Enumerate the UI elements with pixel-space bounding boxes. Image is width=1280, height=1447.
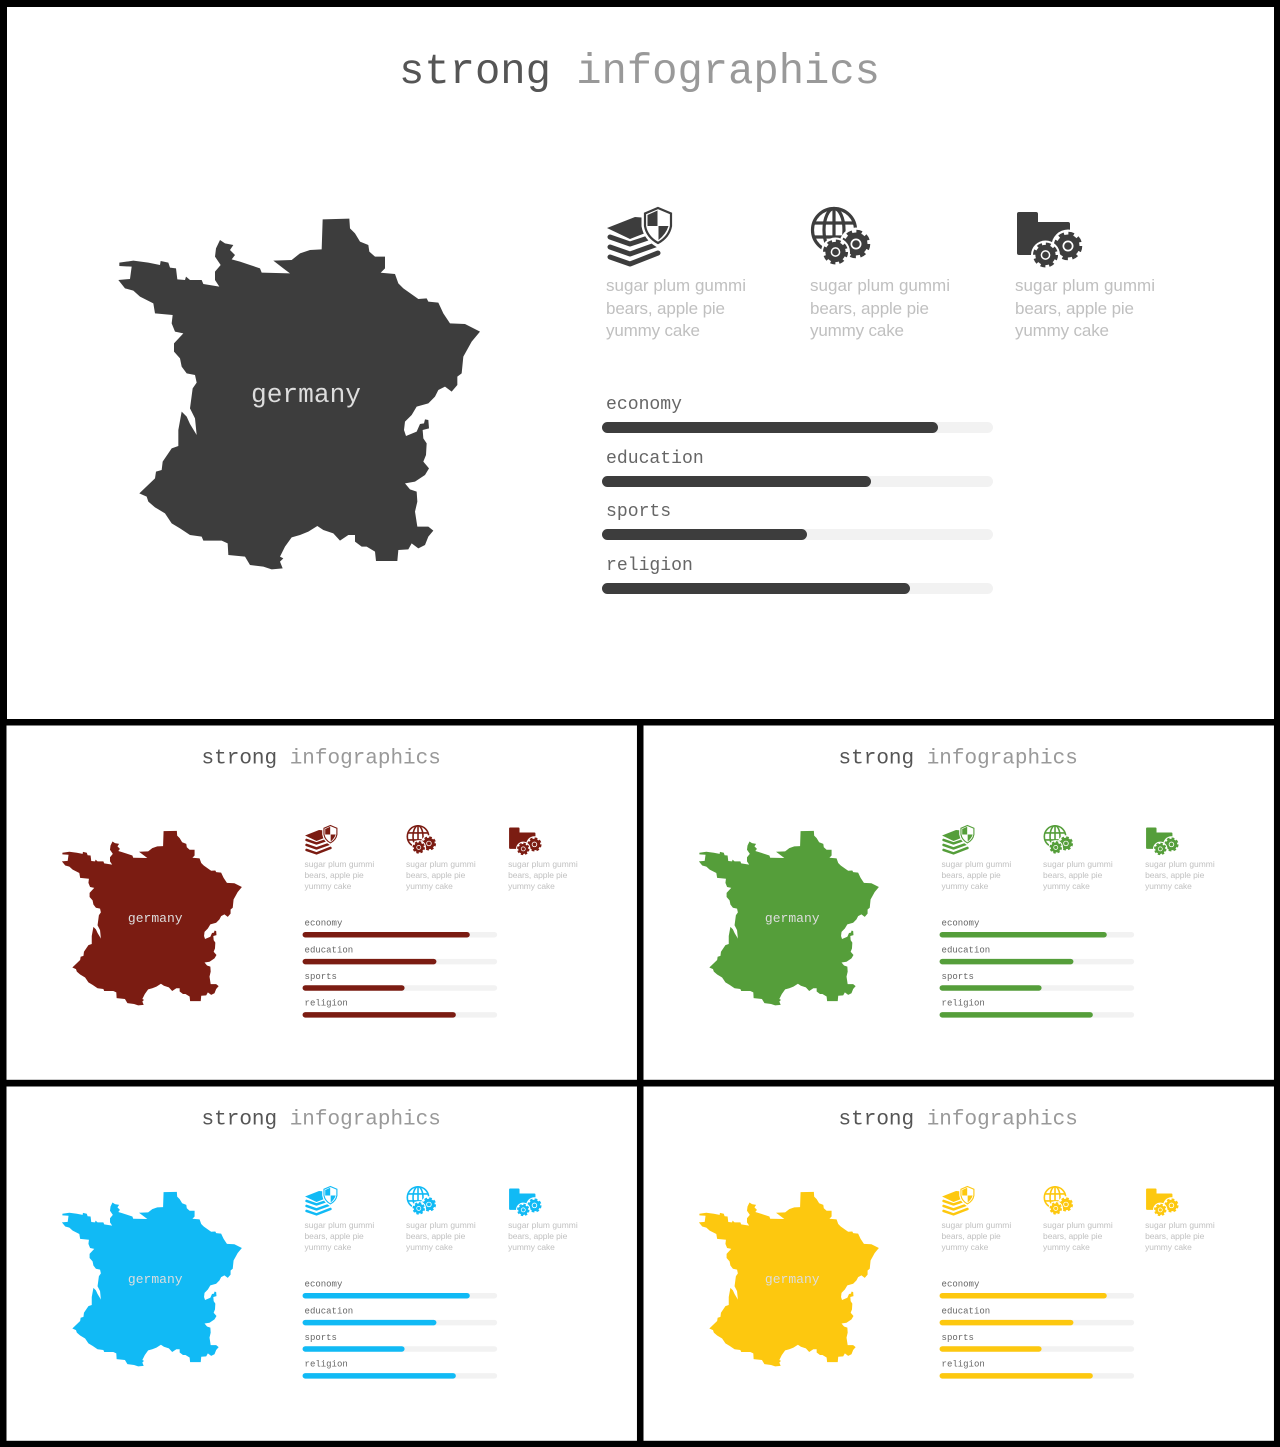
bar chart: education (942, 945, 990, 955)
map label: germany (128, 1272, 183, 1287)
text block 1: sugar plum gummi (305, 859, 374, 869)
bar chart: education (606, 449, 704, 469)
text block 2: yummy cake (406, 1242, 453, 1252)
text block 3: sugar plum gummi (1015, 276, 1155, 295)
bar chart: religion (305, 999, 348, 1009)
icon: folder with gears (1146, 1189, 1180, 1217)
text block 2: yummy cake (810, 321, 904, 340)
map of country (62, 1192, 242, 1366)
bar chart: education (305, 1306, 353, 1316)
text block 3: bears, apple pie (1015, 299, 1134, 318)
text block 2: bears, apple pie (810, 299, 929, 318)
bar chart (303, 1280, 497, 1379)
text block 3: yummy cake (508, 881, 555, 891)
text block 2: yummy cake (1043, 881, 1090, 891)
bar chart: religion (942, 1360, 985, 1370)
text block 2: sugar plum gummi (810, 276, 950, 295)
text block 3: sugar plum gummi (1145, 1220, 1215, 1230)
bar chart (940, 919, 1134, 1018)
map label: germany (765, 911, 820, 926)
text block 1: sugar plum gummi (942, 1220, 1011, 1230)
text block 1: yummy cake (305, 1242, 352, 1252)
bar chart: education (942, 1306, 990, 1316)
text block 3: yummy cake (508, 1242, 555, 1252)
bar chart: sports (305, 972, 337, 982)
icon: folder with gears (1017, 212, 1084, 270)
text block 1: sugar plum gummi (305, 1220, 374, 1230)
text block 3: sugar plum gummi (508, 859, 578, 869)
text block 1: yummy cake (942, 1242, 989, 1252)
text block 3: bears, apple pie (1145, 1231, 1205, 1241)
bar chart: economy (942, 919, 980, 929)
text block 2: sugar plum gummi (1043, 1220, 1113, 1230)
panel: main dark slide (7, 7, 1274, 719)
text block 2: bears, apple pie (406, 1231, 466, 1241)
text block 1: bears, apple pie (942, 870, 1001, 880)
text block 2: yummy cake (1043, 1242, 1090, 1252)
bar chart: sports (606, 502, 671, 522)
map label: germany (251, 380, 361, 410)
bar chart: economy (305, 919, 343, 929)
text block 1: bears, apple pie (606, 299, 725, 318)
bar chart: religion (606, 556, 693, 576)
text block 2: sugar plum gummi (406, 859, 476, 869)
icon: folder with gears (509, 828, 543, 856)
panel: blue slide (6, 1086, 637, 1441)
icon: globe with gears (1044, 1187, 1074, 1216)
bar chart (303, 919, 497, 1018)
bar chart (602, 395, 993, 594)
text block 2: bears, apple pie (1043, 870, 1103, 880)
text block 2: sugar plum gummi (406, 1220, 476, 1230)
map of country (699, 831, 879, 1005)
bar chart: economy (942, 1280, 980, 1290)
text block 1: yummy cake (606, 321, 700, 340)
bar chart (940, 1280, 1134, 1379)
text block 3: yummy cake (1145, 1242, 1192, 1252)
text block 3: sugar plum gummi (1145, 859, 1215, 869)
text block 2: bears, apple pie (1043, 1231, 1103, 1241)
bar chart: religion (305, 1360, 348, 1370)
icon: folder with gears (509, 1189, 543, 1217)
text block 3: bears, apple pie (508, 870, 568, 880)
bar chart: education (305, 945, 353, 955)
icon: stack with shield (942, 825, 974, 853)
text block 2: bears, apple pie (406, 870, 466, 880)
icon: globe with gears (812, 208, 872, 267)
panel: green slide (643, 725, 1274, 1080)
map of country (118, 219, 480, 569)
text block 1: yummy cake (942, 881, 989, 891)
title: strong infographics (839, 1108, 1078, 1131)
map label: germany (128, 911, 183, 926)
icon: globe with gears (407, 826, 437, 855)
icon: stack with shield (607, 207, 672, 264)
title: strong infographics (202, 1108, 441, 1131)
title: strong infographics (399, 48, 880, 96)
text block 3: bears, apple pie (508, 1231, 568, 1241)
map of country (62, 831, 242, 1005)
text block 2: yummy cake (406, 881, 453, 891)
icon: stack with shield (305, 825, 337, 853)
text block 1: bears, apple pie (942, 1231, 1001, 1241)
text block 3: sugar plum gummi (508, 1220, 578, 1230)
text block 1: yummy cake (305, 881, 352, 891)
bar chart: sports (942, 972, 974, 982)
text block 2: sugar plum gummi (1043, 859, 1113, 869)
title: strong infographics (839, 747, 1078, 770)
text block 1: bears, apple pie (305, 870, 364, 880)
bar chart: sports (305, 1333, 337, 1343)
icon: globe with gears (407, 1187, 437, 1216)
text block 1: sugar plum gummi (942, 859, 1011, 869)
bar chart: economy (305, 1280, 343, 1290)
text block 3: yummy cake (1015, 321, 1109, 340)
panel: yellow slide (643, 1086, 1274, 1441)
icon: stack with shield (305, 1186, 337, 1214)
map of country (699, 1192, 879, 1366)
text block 1: bears, apple pie (305, 1231, 364, 1241)
bar chart: sports (942, 1333, 974, 1343)
icon: stack with shield (942, 1186, 974, 1214)
title: strong infographics (202, 747, 441, 770)
icon: globe with gears (1044, 826, 1074, 855)
map label: germany (765, 1272, 820, 1287)
panel: red slide (6, 725, 637, 1080)
bar chart: religion (942, 999, 985, 1009)
bar chart: economy (606, 395, 682, 415)
text block 3: yummy cake (1145, 881, 1192, 891)
text block 3: bears, apple pie (1145, 870, 1205, 880)
text block 1: sugar plum gummi (606, 276, 746, 295)
icon: folder with gears (1146, 828, 1180, 856)
